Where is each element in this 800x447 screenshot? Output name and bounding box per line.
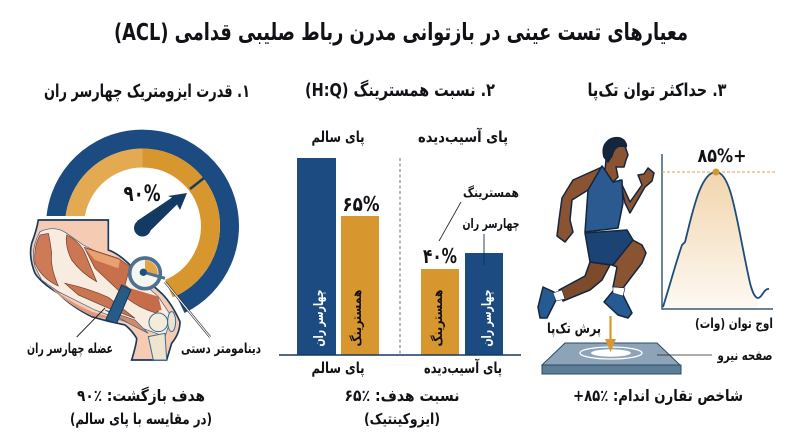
rear shoe xyxy=(538,287,556,318)
leader lines xyxy=(77,282,210,337)
target ratio: نسبت هدف: ٪۶۵ xyxy=(344,386,460,405)
neck and head xyxy=(605,146,628,182)
illustration: knee with dynamometer xyxy=(31,220,180,360)
bar label: quadriceps injured: چهارسر ران xyxy=(480,290,495,346)
heading: panel 3: ۳. حداکثر توان تک‌پا xyxy=(588,80,726,101)
label: force plate: صفحه نیرو xyxy=(717,348,772,364)
axis label: peak power: اوج توان (وات) xyxy=(695,316,773,332)
shorts xyxy=(585,230,633,265)
back arm xyxy=(557,167,602,242)
panel: hamstring to quadriceps ratio xyxy=(279,79,521,428)
label: hand dynamometer: دینامومتر دستی xyxy=(181,341,261,357)
callout: hamstring: همسترینگ xyxy=(463,185,519,201)
illustration: runner xyxy=(538,138,654,318)
value: 40 percent: ۴۰% xyxy=(423,244,457,268)
label: quadriceps muscle: عضله چهارسر ران xyxy=(27,341,113,357)
isokinetic note: (ایزوکینتیک) xyxy=(364,410,440,428)
front shoe xyxy=(604,291,632,318)
power curve chart xyxy=(662,154,775,309)
gauge value: ۹۰% xyxy=(124,182,160,207)
label: injured leg bottom: پای آسیب‌دیده xyxy=(424,359,502,378)
bar: injured hamstring xyxy=(421,269,459,355)
front leg xyxy=(605,237,646,288)
bar chart xyxy=(279,158,521,355)
bar: injured quadriceps xyxy=(465,253,503,355)
panel: single leg peak power xyxy=(538,80,775,405)
bar label: hamstring: همسترینگ xyxy=(349,290,365,346)
label: healthy leg top: پای سالم xyxy=(312,128,364,147)
bar: healthy hamstring xyxy=(341,216,379,355)
front arm xyxy=(620,168,654,213)
bar: healthy quadriceps xyxy=(297,158,336,355)
comparison note: (در مقایسه با پای سالم) xyxy=(70,410,212,429)
label: injured leg top: پای آسیب‌دیده xyxy=(418,128,508,147)
arrow: jump landing xyxy=(605,316,616,352)
force plate xyxy=(542,343,681,374)
callout: quadriceps: چهارسر ران xyxy=(462,217,520,232)
heading: panel 1: ۱. قدرت ایزومتریک چهارسر ران xyxy=(44,81,250,102)
heading: panel 2: ۲. نسبت همسترینگ (H:Q) xyxy=(305,79,495,101)
rear leg xyxy=(559,262,610,301)
return goal: هدف بازگشت: ٪۹۰ xyxy=(77,386,205,405)
gauge xyxy=(56,139,229,304)
bar label: hamstring injured: همسترینگ xyxy=(430,290,446,346)
callout lines xyxy=(439,202,484,265)
label: healthy leg bottom: پای سالم xyxy=(312,359,364,378)
panel: isometric quadriceps strength xyxy=(27,81,261,429)
bar label: quadriceps: چهارسر ران xyxy=(312,290,327,346)
torso xyxy=(585,166,623,232)
label: single leg jump: پرش تک‌پا xyxy=(547,321,601,337)
value: peak: ۸۵%+ xyxy=(698,145,746,167)
symmetry index: شاخص تقارن اندام: ٪۸۵+ xyxy=(573,386,743,405)
value: 65 percent: ۶۵% xyxy=(342,192,380,216)
force plate leader xyxy=(657,354,712,356)
